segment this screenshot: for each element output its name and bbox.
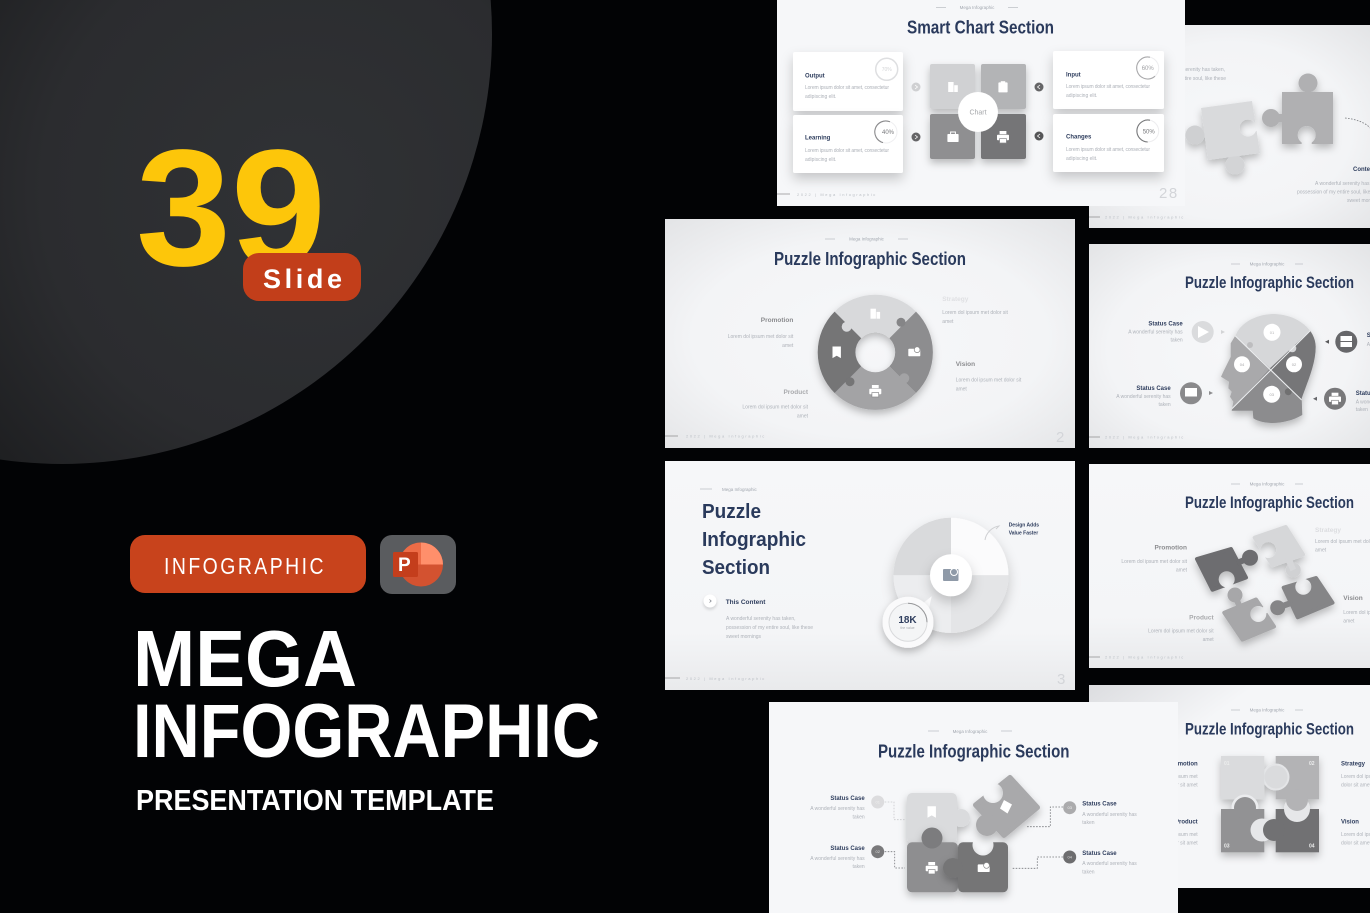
piece numbers: 01 [1224,761,1230,767]
panel: donut value slide: Mega Infographic [722,487,758,492]
panel: puzzle wheel slide [665,219,1075,448]
wheel labels: Vision [956,361,975,368]
wheel labels: Strategy [942,296,969,303]
dark decorative circle [0,0,492,464]
chart: four squares [930,64,1026,159]
panel: smart chart slide: 2022 | Mega Infographic [797,192,877,197]
panel: smart chart slide: Mega Infographic [960,5,995,10]
panel: two puzzle pieces slide: A wonderful serenity has taken, [1156,67,1225,73]
connected labels: A wonderful serenity has [810,856,865,862]
head number badges: 03 [1269,392,1275,397]
card: output: Lorem ipsum dolor sit amet, consectetur [805,85,889,91]
four square labels: Promotion [1168,762,1198,768]
value bubble: 18K [898,615,917,626]
panel: donut value slide [665,461,1075,690]
icon: powerpoint: P [398,555,411,576]
head labels [1116,322,1370,413]
piece numbers: 02 [1309,761,1315,767]
infographic badge: INFOGRAPHIC [164,553,326,579]
main title: MEGA [133,614,357,703]
panel: diagonal puzzle slide: 2022 | Mega Infographic [1105,654,1185,660]
connected labels: taken [852,814,865,820]
four square labels [1151,762,1370,846]
chart centre [958,92,998,132]
number badges [871,796,1076,864]
connected labels: A wonderful serenity has [810,806,865,812]
tilted piece [976,778,1038,836]
head number badges: 04 [1240,362,1245,367]
chart centre: Chart [969,110,987,116]
piece numbers: 03 [1224,844,1230,850]
dark piece [1262,74,1333,144]
dark piece [943,842,1008,892]
dotted connectors [885,802,1063,868]
panel: donut value slide: 2022 | Mega Infographic [686,676,766,681]
diagonal labels: Lorem dol ipsum met dolor sit [1148,628,1214,634]
panel: smart chart slide: Smart Chart Section [907,18,1054,38]
chart: four interlocking pieces [1221,756,1319,852]
card: input: Input [1066,72,1081,78]
card: changes: adipiscing elit. [1066,156,1097,162]
four square labels: dolor sit amet [1168,840,1198,846]
chart: head [1218,314,1320,431]
wheel labels: Promotion [761,317,793,324]
connected labels [810,796,1137,876]
panel: donut value slide: 3 [1057,671,1065,688]
subtitle: PRESENTATION TEMPLATE [136,785,494,817]
infographic badge [130,535,366,593]
number badges: 01 [875,800,881,804]
four square labels: Lorem dol ipsum met [1151,774,1198,780]
connected labels: Status Case [830,846,865,852]
wheel labels: amet [797,414,809,420]
number 39: 39 [136,116,326,301]
head labels: Status Case [1148,322,1183,328]
callout text: Design Adds [1009,523,1039,529]
connected labels: taken [1082,820,1095,826]
value bubble: the value [900,626,915,630]
head labels: A wonderful serenity has [1116,394,1171,400]
panel: smart chart slide: 28 [1159,185,1179,202]
panel: donut value slide: possession of my entire soul, like these [726,625,813,631]
diagonal labels: Vision [1343,595,1363,602]
panel: donut value slide: sweet mornings [726,634,762,640]
card: input: 60% [1142,66,1154,72]
head labels: taken [1356,407,1368,413]
card: learning: Lorem ipsum dolor sit amet, consectetur [805,148,889,154]
wheel labels: Lorem dol ipsum met dolor sit [956,378,1022,384]
four square labels: Lorem dol ipsum met [1151,832,1198,838]
card: learning: adipiscing elit. [805,157,836,163]
head labels: A wonderful serenity has [1128,330,1183,336]
connected labels: Status Case [1082,851,1117,857]
card: learning: Learning [805,136,831,142]
wheel labels [728,296,1022,420]
number badges: 04 [1067,854,1073,860]
curved arrow [985,526,999,540]
diagonal labels: Lorem dol ipsum met dolor sit [1121,559,1188,565]
four square labels: dolor sit amet [1168,782,1198,788]
wheel labels: amet [782,343,794,349]
diagonal labels: Product [1189,614,1215,622]
diagonal labels: amet [1315,548,1327,554]
panel: head puzzle slide [1089,244,1370,463]
panel: connected puzzle slide [769,702,1178,913]
diagonal labels: amet [1176,568,1188,574]
value bubble [882,596,934,648]
diagonal labels: Strategy [1315,527,1341,534]
connected labels: A wonderful serenity has [1082,861,1137,867]
card: changes: 50% [1143,130,1155,136]
connected labels: A wonderful serenity has [1082,812,1137,818]
number badges: 02 [875,849,881,854]
card: changes: Lorem ipsum dolor sit amet, consectetur [1066,147,1150,153]
four square labels: Product [1175,820,1198,826]
head number badges: 01 [1270,330,1275,335]
connected labels: Status Case [1082,802,1117,808]
card: changes: Changes [1066,134,1092,140]
card: learning: 40% [882,130,895,136]
panel: donut value slide: This Content [726,599,766,606]
connected labels: taken [1082,870,1095,876]
card: input [1053,51,1164,109]
four square labels: Vision [1341,820,1359,826]
connected labels: Status Case [830,796,865,802]
wheel labels: Lorem dol ipsum met dolor sit [728,334,794,340]
diagonal labels [1121,527,1370,643]
mid grey puzzle piece [1224,588,1274,640]
wheel labels: Lorem dol ipsum met dolor sit [742,404,809,410]
head number badges [1234,324,1302,403]
head number badges: 02 [1292,362,1297,367]
panel: diagonal puzzle slide [1089,464,1370,668]
panel: two puzzle pieces slide: possession of my entire soul, like these [1139,76,1226,82]
wheel labels: Product [783,389,809,396]
panel: puzzle wheel slide: Puzzle Infographic Section [774,249,966,269]
wheel labels: amet [942,319,954,325]
mid grey piece [907,828,958,892]
panel: puzzle wheel slide: 2022 | Mega Infographic [686,434,766,438]
card: output: adipiscing elit. [805,94,836,100]
panel: donut value slide: Puzzle [702,501,761,523]
card: input: adipiscing elit. [1066,93,1097,99]
head icons [1180,321,1357,410]
diagonal labels: Promotion [1154,544,1187,552]
panel: four square puzzle slide: Mega Infographic [1250,708,1285,712]
wheel labels: Lorem dol ipsum met dolor sit [942,310,1008,316]
panel: head puzzle slide: 2022 | Mega Infographic [1105,434,1185,440]
card: output: Output [805,74,825,80]
diagonal labels: amet [1203,637,1214,643]
arrow buttons [912,82,1044,142]
panel: puzzle wheel slide: Mega Infographic [849,236,885,242]
light piece [907,793,970,843]
light puzzle piece [1255,527,1303,578]
panel: puzzle wheel slide: 2 [1056,429,1064,446]
slide badge: Slide [263,264,342,294]
piece numbers: 04 [1309,844,1315,850]
dark puzzle piece [1197,549,1258,590]
right grey puzzle piece [1270,578,1332,617]
card: input: Lorem ipsum dolor sit amet, consectetur [1066,84,1150,90]
main title [133,614,600,774]
chart: disc [894,518,1008,633]
panel: smart chart slide [777,0,1185,206]
head labels: Status Case [1136,386,1171,392]
connected labels: taken [852,864,865,870]
head labels: taken [1170,338,1183,344]
panel: two puzzle pieces slide: 2022 | Mega Infographic [1105,214,1185,220]
panel: donut value slide: Infographic [702,529,806,551]
chart: puzzle wheel [818,295,933,410]
panel: head puzzle slide: Mega Infographic [1250,262,1285,266]
panel: donut value slide: Section [702,557,770,579]
main title: INFOGRAPHIC [133,689,600,774]
callout text [1009,523,1039,536]
diagonal labels: amet [1343,618,1355,624]
panel: two puzzle pieces slide [1089,25,1370,228]
light tilted piece [1186,101,1260,174]
four square labels: Strategy [1341,762,1366,768]
card: output [793,52,903,111]
number badges: 03 [1067,805,1073,810]
panel: diagonal puzzle slide: Mega Infographic [1250,482,1285,486]
panel: connected puzzle slide: Mega Infographic [953,729,988,734]
card: output: 70% [882,67,892,73]
icon: powerpoint [380,535,456,594]
callout text: Value Faster [1009,530,1038,536]
panel: donut value slide: A wonderful serenity has taken, [726,616,796,622]
head labels: taken [1158,402,1171,408]
wheel labels: amet [956,386,967,392]
panel: four square puzzle slide [1089,685,1370,888]
piece numbers [1224,761,1315,850]
card: learning [793,115,903,173]
bullet [703,594,717,610]
panel: connected puzzle slide: Puzzle Infographic Section [878,742,1070,762]
card: changes [1053,114,1164,172]
slide badge [243,253,361,301]
